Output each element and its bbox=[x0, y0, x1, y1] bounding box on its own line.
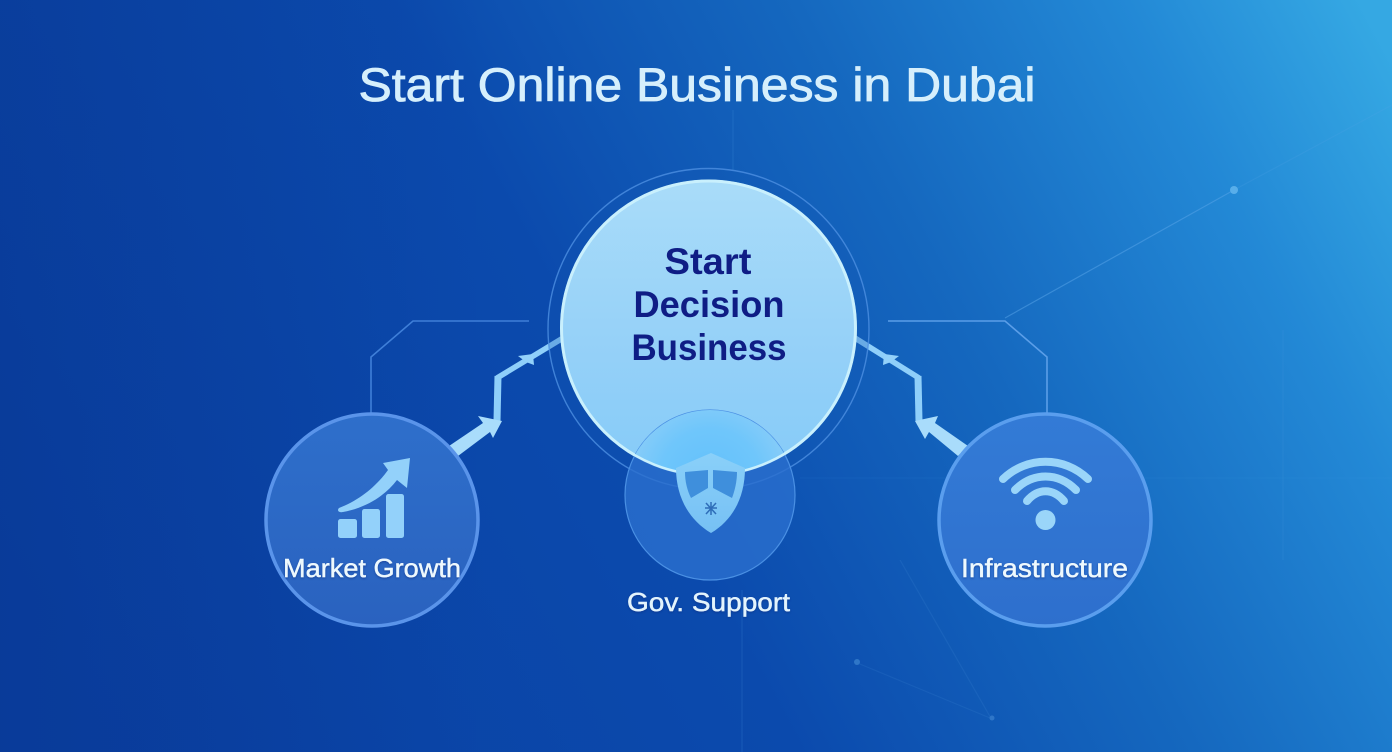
node label: Infrastructure bbox=[961, 553, 1128, 583]
icon: bar chart with arrow bbox=[338, 458, 410, 538]
node: market growth bbox=[266, 414, 478, 626]
node label: Gov. Support bbox=[627, 587, 791, 617]
title: Start Online Business in Dubai bbox=[358, 58, 1036, 111]
arrow: market growth to center bbox=[449, 338, 563, 456]
central label: Business bbox=[632, 327, 786, 368]
central label bbox=[632, 241, 786, 368]
connector outline: left bbox=[371, 321, 529, 413]
arrow: infrastructure to center bbox=[855, 338, 968, 456]
central decision circle bbox=[548, 168, 869, 490]
connector outline: right bbox=[888, 321, 1047, 413]
icon: wifi bbox=[1003, 462, 1088, 530]
node label: Market Growth bbox=[283, 553, 461, 583]
central label: Decision bbox=[634, 284, 784, 325]
node: infrastructure bbox=[939, 414, 1151, 626]
decorative network lines bbox=[733, 105, 1392, 752]
central label: Start bbox=[664, 241, 752, 282]
icon: shield bbox=[676, 453, 745, 533]
node: government support bbox=[562, 181, 856, 617]
